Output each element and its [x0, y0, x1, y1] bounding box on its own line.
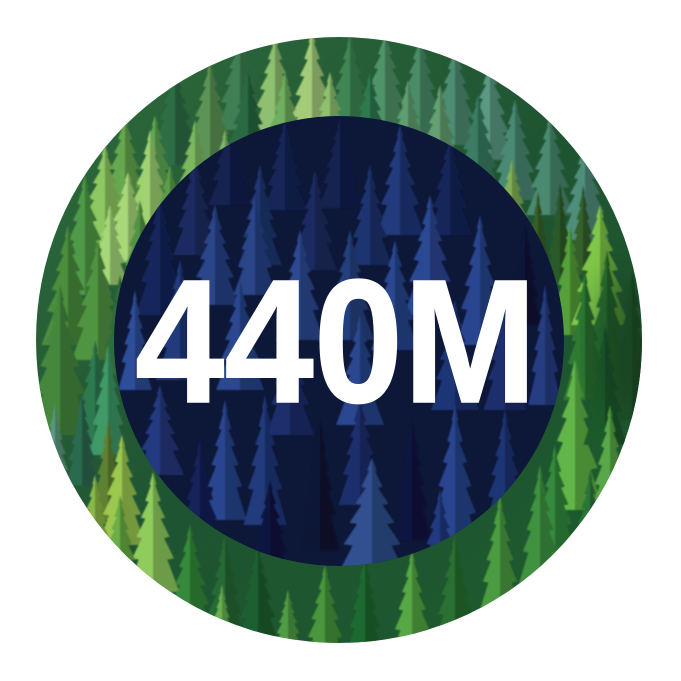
- navy inner circle: [110, 110, 570, 590]
- headline number: 440M: [135, 244, 537, 440]
- dark tone patch right: [597, 270, 653, 410]
- blue forest trees: [118, 115, 562, 590]
